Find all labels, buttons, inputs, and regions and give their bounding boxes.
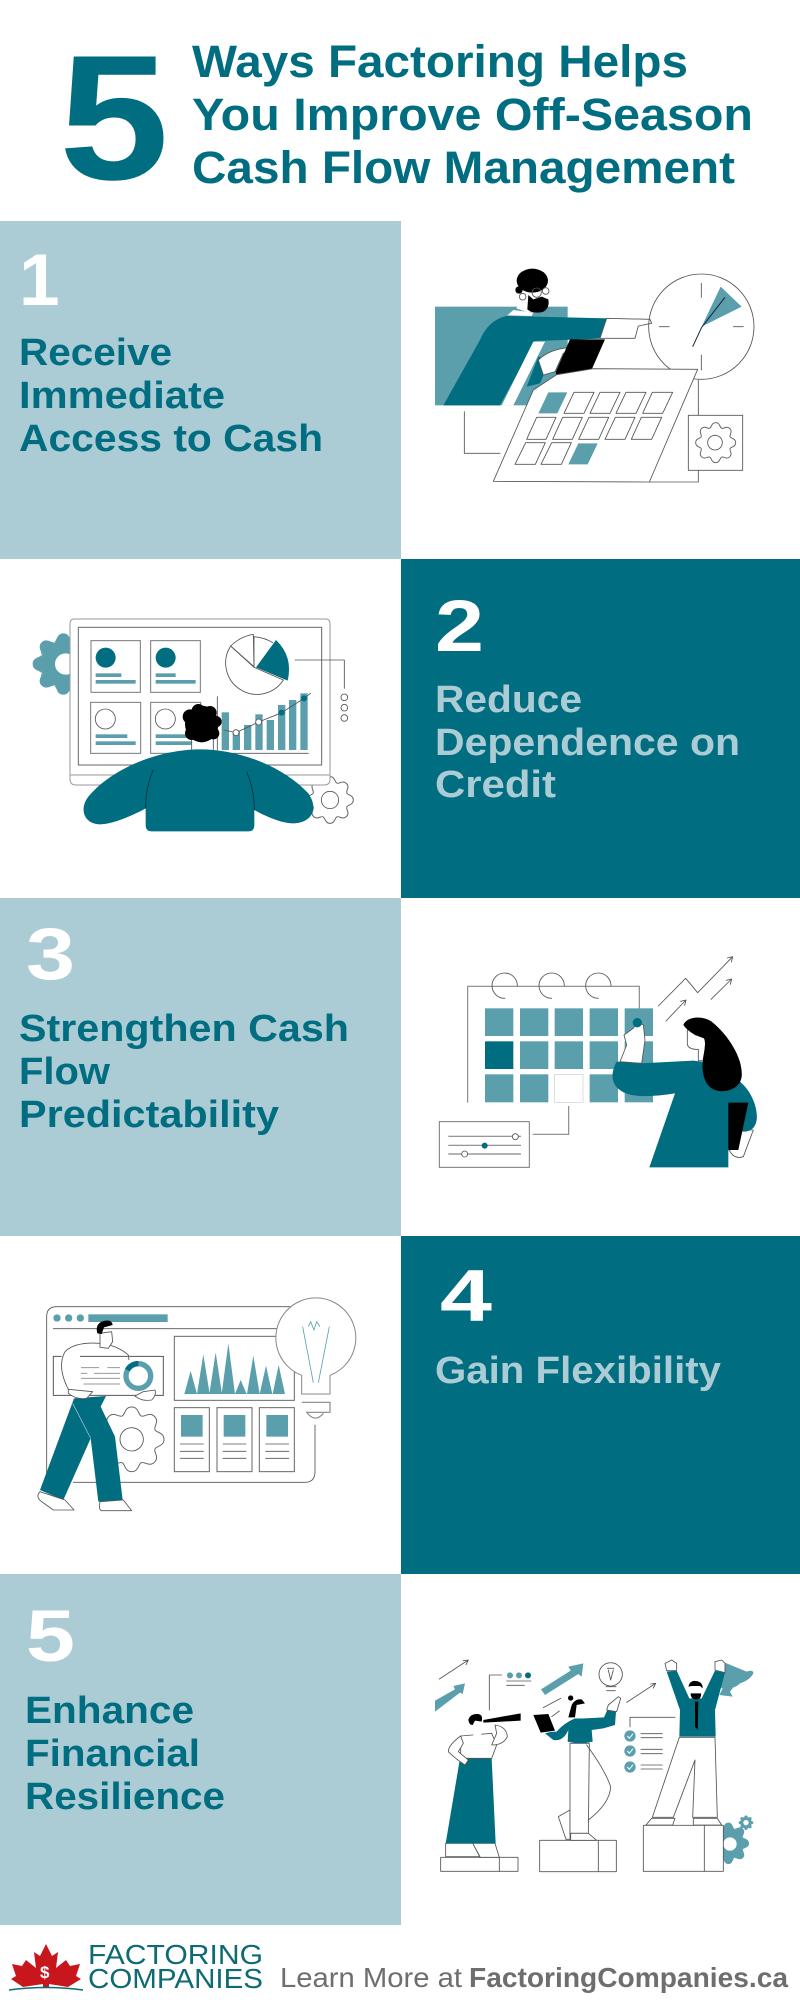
logo: red maple leaf with dollar sign: [9, 1944, 83, 1990]
learn more link text: [280, 1962, 788, 1993]
title: Ways Factoring Helps: [192, 36, 688, 87]
footer: [9, 1939, 788, 1994]
panel: step 1: [0, 221, 401, 559]
heading: receive immediate access to cash: Immediate: [19, 375, 225, 417]
heading: enhance financial resilience: [25, 1690, 225, 1818]
heading: reduce dependence on credit: Credit: [435, 764, 556, 806]
learn more link text: FactoringCompanies.ca: [469, 1962, 788, 1993]
heading: strengthen cash flow predictability: Strengthen Cash: [19, 1008, 349, 1050]
title: You Improve Off-Season: [192, 89, 753, 140]
illustration: man pointing at clock and calendar: [435, 269, 754, 482]
logo wordmark: FACTORING: [88, 1939, 263, 1970]
learn more link text: Learn More at: [280, 1962, 462, 1993]
title: [59, 18, 753, 217]
step number 1: 1: [19, 240, 60, 321]
heading: receive immediate access to cash: Access to Cash: [19, 418, 323, 460]
heading: enhance financial resilience: Enhance: [25, 1690, 194, 1732]
logo wordmark: [88, 1939, 263, 1994]
heading: enhance financial resilience: Resilience: [25, 1776, 225, 1818]
heading: enhance financial resilience: Financial: [25, 1733, 200, 1775]
illustration: woman marking a calendar: [439, 957, 757, 1167]
panel: step 5: [0, 1574, 401, 1925]
heading: receive immediate access to cash: Receive: [19, 332, 172, 374]
heading: gain flexibility: Gain Flexibility: [435, 1350, 721, 1392]
heading: strengthen cash flow predictability: Flow: [19, 1051, 110, 1093]
title: 5: [59, 18, 169, 217]
heading: strengthen cash flow predictability: Predictability: [19, 1094, 279, 1136]
step number 2: 2: [435, 586, 484, 667]
heading: reduce dependence on credit: [435, 679, 740, 806]
heading: receive immediate access to cash: [19, 332, 323, 460]
illustration: three people on pedestals celebrating growth: [435, 1660, 753, 1872]
logo: red maple leaf with dollar sign: $: [40, 1963, 50, 1982]
panel: step 3: [0, 898, 401, 1236]
illustration: person at analytics dashboard: [33, 619, 353, 831]
step number 4: 4: [440, 1256, 493, 1337]
heading: strengthen cash flow predictability: [19, 1008, 349, 1136]
title: Cash Flow Management: [192, 142, 735, 193]
heading: reduce dependence on credit: Dependence on: [435, 722, 740, 764]
logo wordmark: COMPANIES: [88, 1963, 263, 1994]
illustration: man carrying a chart past a dashboard: [38, 1298, 356, 1511]
panel: step 2: [401, 559, 800, 898]
step number 3: 3: [26, 914, 75, 995]
panel: step 4: [401, 1236, 800, 1574]
step number 5: 5: [26, 1596, 75, 1677]
heading: reduce dependence on credit: Reduce: [435, 679, 582, 721]
